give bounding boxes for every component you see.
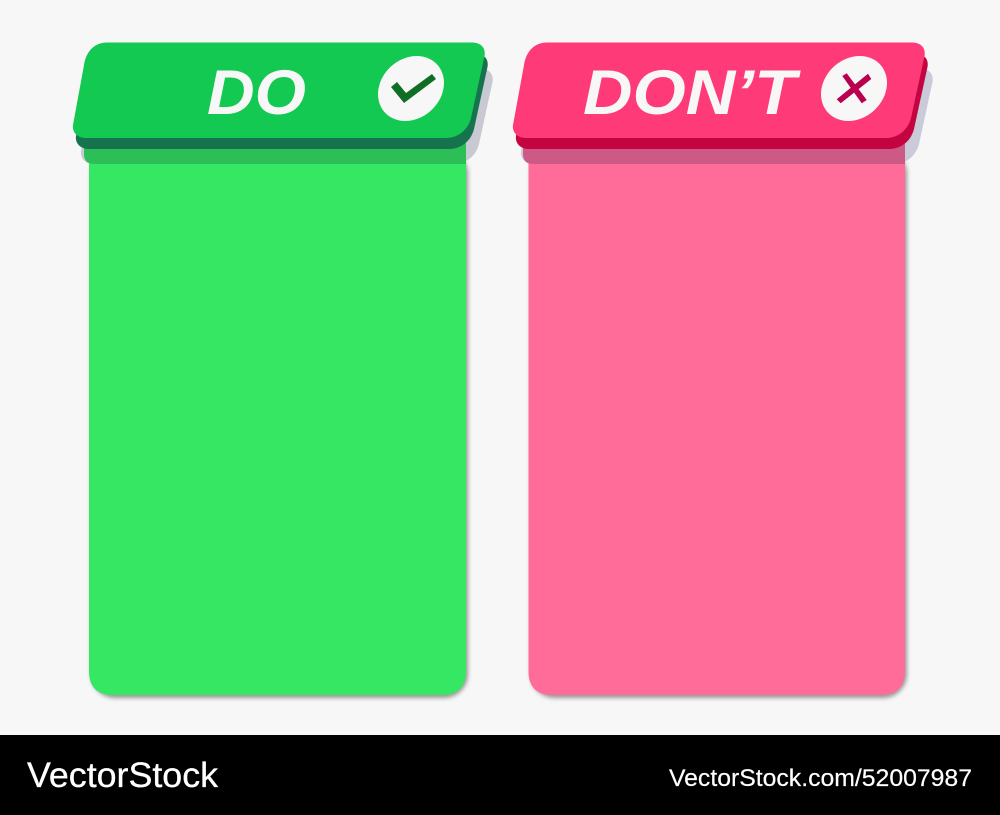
panel: don't [513,42,933,698]
banner face [73,42,485,138]
do banner [73,42,493,164]
don't panel body [528,150,905,695]
heading: DO: DO [207,58,306,128]
banner depth edge [76,54,488,149]
don't banner [513,42,933,164]
icon: cross mark [816,56,892,121]
footer url text: VectorStock.com/52007987 [669,765,972,792]
banner cast shadow [521,68,933,164]
banner cast shadow [81,68,493,164]
footer bar [0,735,1000,815]
heading: DON'T: DON’T [583,58,801,128]
footer logo text: VectorStock [27,756,219,795]
icon: check mark [373,56,449,121]
do panel body [89,150,466,695]
banner depth edge [516,54,928,149]
banner face [513,42,925,138]
panel: do [73,42,493,698]
